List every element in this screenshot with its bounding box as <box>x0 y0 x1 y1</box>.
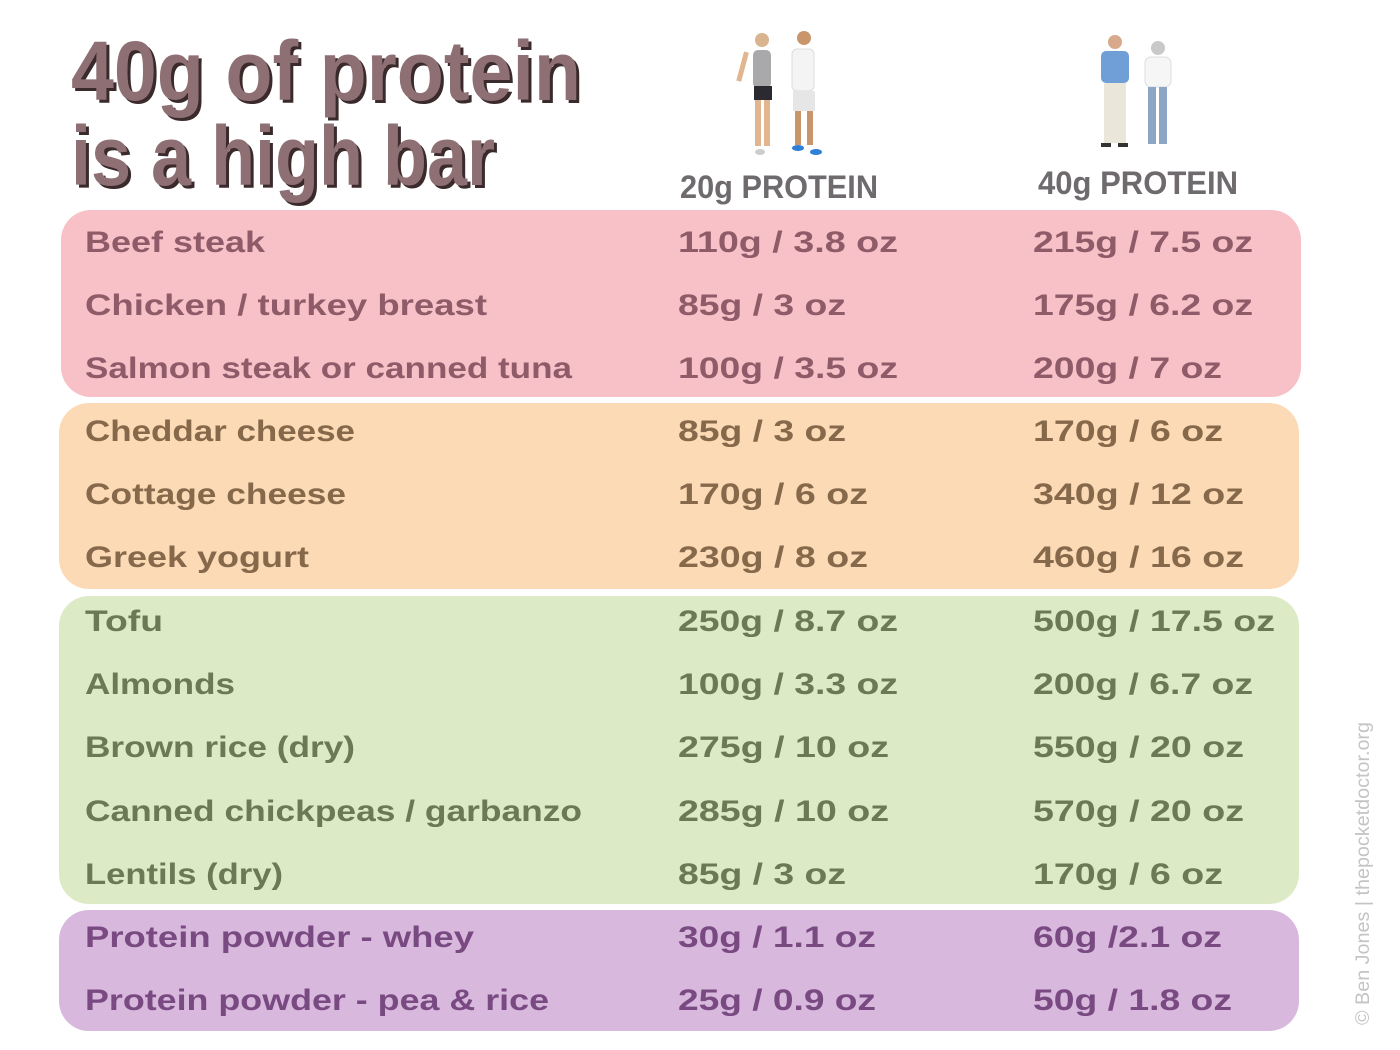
panel: protein powder: 50g / 1.8 oz <box>1033 984 1232 1017</box>
panel: dairy: 170g / 6 oz <box>678 478 868 511</box>
panel: plant foods: Lentils (dry) <box>85 858 283 891</box>
panel: plant foods: 570g / 20 oz <box>1033 795 1244 828</box>
panel: plant foods: 100g / 3.3 oz <box>678 668 898 701</box>
panel: dairy: Cottage cheese <box>85 478 346 511</box>
panel: plant foods <box>59 596 1299 904</box>
panel: dairy: Greek yogurt <box>85 541 309 574</box>
panel: plant foods: Brown rice (dry) <box>85 731 355 764</box>
panel: plant foods: 200g / 6.7 oz <box>1033 668 1253 701</box>
panel: dairy: 230g / 8 oz <box>678 541 868 574</box>
panel: plant foods: 250g / 8.7 oz <box>678 605 898 638</box>
panel: meat and fish: Salmon steak or canned tuna <box>85 352 572 385</box>
panel: meat and fish: Beef steak <box>85 226 265 259</box>
panel: protein powder: 25g / 0.9 oz <box>678 984 876 1017</box>
panel: meat and fish: 175g / 6.2 oz <box>1033 289 1253 322</box>
panel: plant foods: 500g / 17.5 oz <box>1033 605 1275 638</box>
heading: 40g protein: 40g PROTEIN <box>1038 165 1238 201</box>
panel: dairy <box>59 403 1299 589</box>
title: is a high bar <box>74 112 498 206</box>
title <box>71 24 584 206</box>
panel: dairy: 170g / 6 oz <box>1033 415 1223 448</box>
panel: protein powder: 60g /2.1 oz <box>1033 921 1222 954</box>
panel: dairy: Cheddar cheese <box>85 415 355 448</box>
panel: plant foods: 550g / 20 oz <box>1033 731 1244 764</box>
credit watermark: © Ben Jones | thepocketdoctor.org <box>1353 722 1374 1025</box>
panel: plant foods: 275g / 10 oz <box>678 731 889 764</box>
title: 40g of protein <box>71 24 581 118</box>
panel: dairy: 340g / 12 oz <box>1033 478 1244 511</box>
panel: plant foods: 285g / 10 oz <box>678 795 889 828</box>
panel: plant foods: Almonds <box>85 668 235 701</box>
panel: meat and fish: 200g / 7 oz <box>1033 352 1222 385</box>
icon: young couple <box>736 31 822 155</box>
panel: meat and fish: 215g / 7.5 oz <box>1033 226 1253 259</box>
icon: older couple <box>1101 35 1171 147</box>
panel: meat and fish: Chicken / turkey breast <box>85 289 487 322</box>
panel: plant foods: 170g / 6 oz <box>1033 858 1223 891</box>
panel: meat and fish: 85g / 3 oz <box>678 289 846 322</box>
panel: protein powder: 30g / 1.1 oz <box>678 921 876 954</box>
panel: dairy: 460g / 16 oz <box>1033 541 1244 574</box>
title: 40g of protein <box>74 27 584 121</box>
panel: dairy: 85g / 3 oz <box>678 415 846 448</box>
panel: protein powder: Protein powder - pea & rice <box>85 984 549 1017</box>
panel: meat and fish: 110g / 3.8 oz <box>678 226 898 259</box>
panel: plant foods: 85g / 3 oz <box>678 858 846 891</box>
panel: meat and fish <box>61 210 1301 397</box>
title: is a high bar <box>71 109 495 203</box>
panel: protein powder <box>59 910 1299 1031</box>
panel: plant foods: Canned chickpeas / garbanzo <box>85 795 582 828</box>
panel: protein powder: Protein powder - whey <box>85 921 474 954</box>
panel: meat and fish: 100g / 3.5 oz <box>678 352 898 385</box>
panel: plant foods: Tofu <box>85 605 163 638</box>
heading: 20g protein: 20g PROTEIN <box>680 169 878 205</box>
